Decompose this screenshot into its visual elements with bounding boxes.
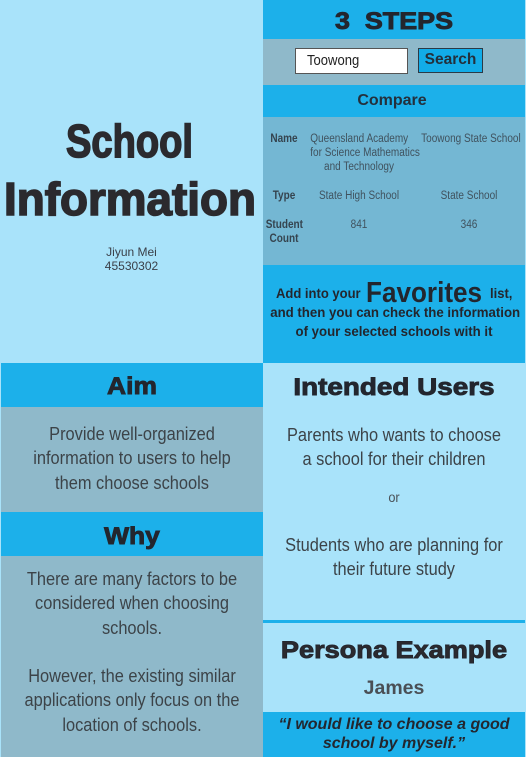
why text: However, the existing similar: [28, 666, 236, 686]
panel: 3 steps: [263, 0, 525, 363]
row: name: for Science Mathematics: [310, 147, 420, 159]
row: name: Name: [270, 132, 298, 144]
row: type: [272, 190, 497, 202]
users text: parents: a school for their children: [302, 449, 485, 469]
row: student count: [266, 218, 477, 245]
why text: location of schools.: [62, 715, 202, 735]
heading: School Information: School: [66, 115, 193, 167]
users text: or: or: [388, 489, 400, 505]
row: student count: 346: [461, 218, 477, 230]
row: name: Toowong State School: [421, 132, 521, 144]
why text: schools.: [102, 618, 162, 638]
callout line 1: Favorites: [366, 276, 482, 308]
row: student count: 841: [351, 218, 367, 230]
heading: aim: Aim: [107, 373, 157, 400]
row: name: [270, 132, 521, 173]
persona quote: school by myself.”: [323, 735, 465, 752]
callout lines 2 and 3: of your selected schools with it: [295, 323, 493, 339]
search input: Toowong: [307, 53, 359, 69]
callout lines 2 and 3: and then you can check the information: [270, 304, 520, 320]
heading: 3 steps: 3 STEPS: [335, 8, 453, 35]
why text: considered when choosing: [35, 593, 229, 613]
users text: students: [285, 534, 503, 579]
users text: parents: Parents who wants to choose: [287, 424, 501, 444]
why text: There are many factors to be: [27, 569, 237, 589]
aim text: Provide well-organized: [49, 424, 215, 444]
panel: persona example: [263, 620, 525, 757]
callout line 1: list,: [490, 284, 512, 300]
row: name: and Technology: [324, 161, 394, 173]
aim text: them choose schools: [55, 473, 209, 493]
row: type: State High School: [319, 190, 399, 202]
heading: why: Why: [104, 523, 160, 550]
callout lines 2 and 3: [270, 304, 520, 339]
users text: parents: [287, 424, 501, 469]
comparison table: [263, 117, 525, 265]
row: name: Queensland Academy: [310, 132, 408, 144]
persona quote: [263, 712, 525, 757]
search button: [418, 48, 483, 73]
heading: School Information: [4, 115, 256, 225]
heading: persona example: Persona Example: [281, 637, 507, 664]
row: type: Type: [273, 190, 295, 202]
heading: School Information: Information: [4, 173, 256, 225]
aim text: [33, 424, 231, 493]
why text: [25, 569, 239, 735]
search bar: [263, 39, 525, 85]
callout line 1: Add into your: [276, 284, 361, 300]
author: Jiyun Mei: [106, 245, 157, 259]
panel: intended users: [263, 363, 525, 620]
favorites callout: [270, 276, 520, 339]
heading: compare: Compare: [357, 92, 427, 109]
heading: aim: [1, 363, 263, 407]
heading: why: [1, 512, 263, 556]
author: 45530302: [105, 259, 158, 273]
row: student count: Count: [270, 233, 298, 245]
author: [105, 245, 158, 273]
panel: aim: [1, 363, 263, 512]
panel: why: [1, 512, 263, 757]
row: student count: Student: [266, 218, 303, 230]
persona quote: “I would like to choose a good: [278, 716, 510, 733]
aim text: information to users to help: [33, 448, 231, 468]
panel: title: [0, 0, 263, 363]
why text: applications only focus on the: [25, 690, 239, 710]
search button: Search: [425, 51, 476, 68]
users text: students: Students who are planning for: [285, 534, 503, 554]
heading: intended users: Intended Users: [293, 374, 495, 400]
search input: [295, 48, 408, 74]
users text: students: their future study: [333, 559, 455, 579]
callout line 1: [276, 276, 512, 308]
persona name: James: [364, 677, 424, 699]
row: type: State School: [441, 190, 497, 202]
